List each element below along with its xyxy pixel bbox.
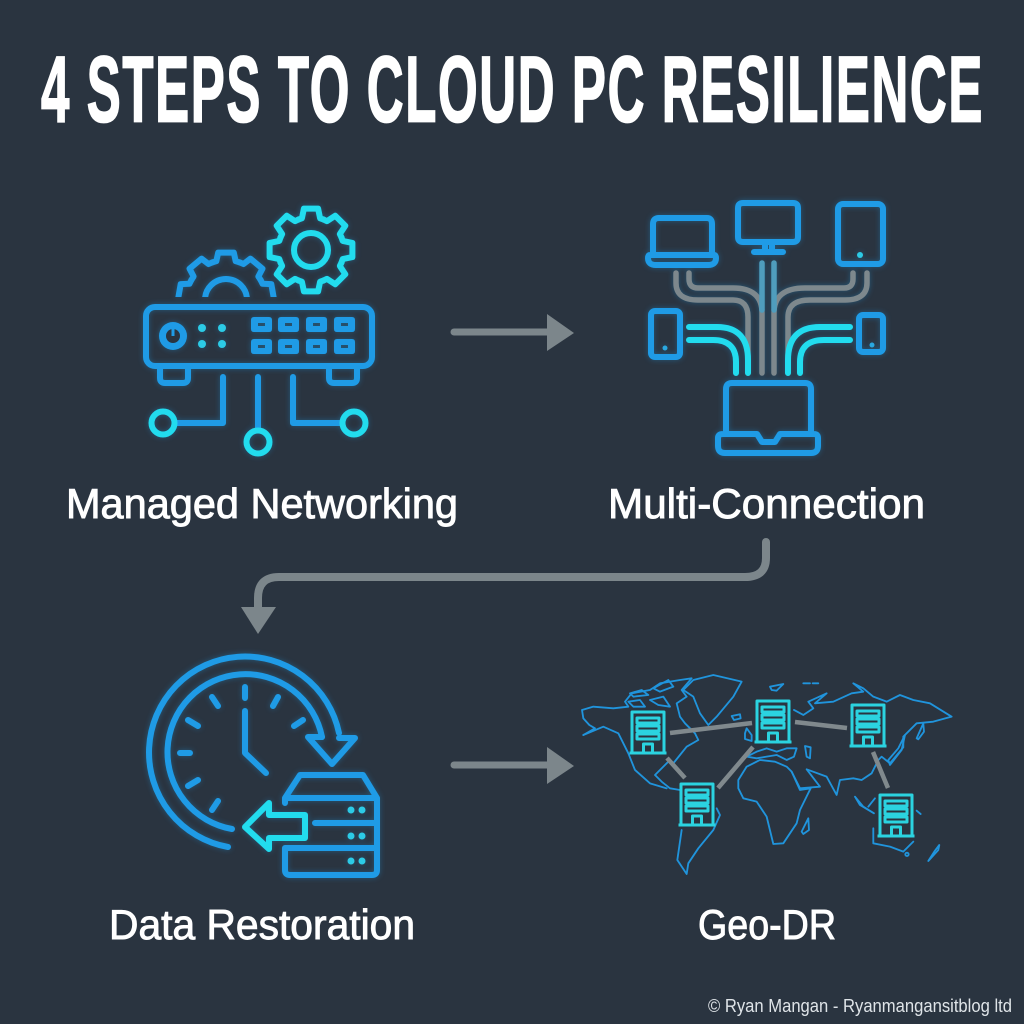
restore data arrow [245,803,305,849]
world map [582,675,952,874]
server lights [348,806,366,864]
arrow: step 2 to 3 [241,542,766,634]
icon: geo-dr world map [582,675,952,874]
data center: asia [850,705,886,746]
restore arcs [149,657,339,847]
power button [159,322,187,350]
arrow: step 3 to 4 [454,747,574,784]
clock ticks [180,687,303,810]
data center: south america [678,784,716,825]
device: right phone [859,315,883,352]
label: data restoration: Data Restoration [109,901,415,948]
icon: multi-connection [648,203,883,453]
icon: cyan gear [270,209,352,291]
arrow: step 1 to 2 [454,314,574,351]
device: laptop [648,218,716,265]
device: tablet [838,204,883,264]
device: main laptop [718,383,818,453]
label: managed networking: Managed Networking [66,480,458,527]
network wires [177,377,340,430]
router body [146,307,372,366]
server stack [285,775,377,875]
connection wires [676,263,867,373]
restore arrowhead [308,737,355,764]
device: monitor [738,203,798,252]
label: multi-connection: Multi-Connection [608,480,925,527]
icon: data restoration [149,657,377,875]
icon: managed networking [146,209,372,454]
router feet [160,368,357,383]
clock hands [245,711,266,773]
network nodes [152,412,366,454]
link lines [667,722,888,788]
data center: europe [754,701,792,742]
device: left phone [651,311,680,357]
label: geo-dr: Geo-DR [698,901,836,948]
data center: australia [878,795,914,836]
ports [251,317,355,354]
icon: blue gear [174,246,278,299]
status dots [198,324,226,348]
data center: north america [630,712,666,753]
